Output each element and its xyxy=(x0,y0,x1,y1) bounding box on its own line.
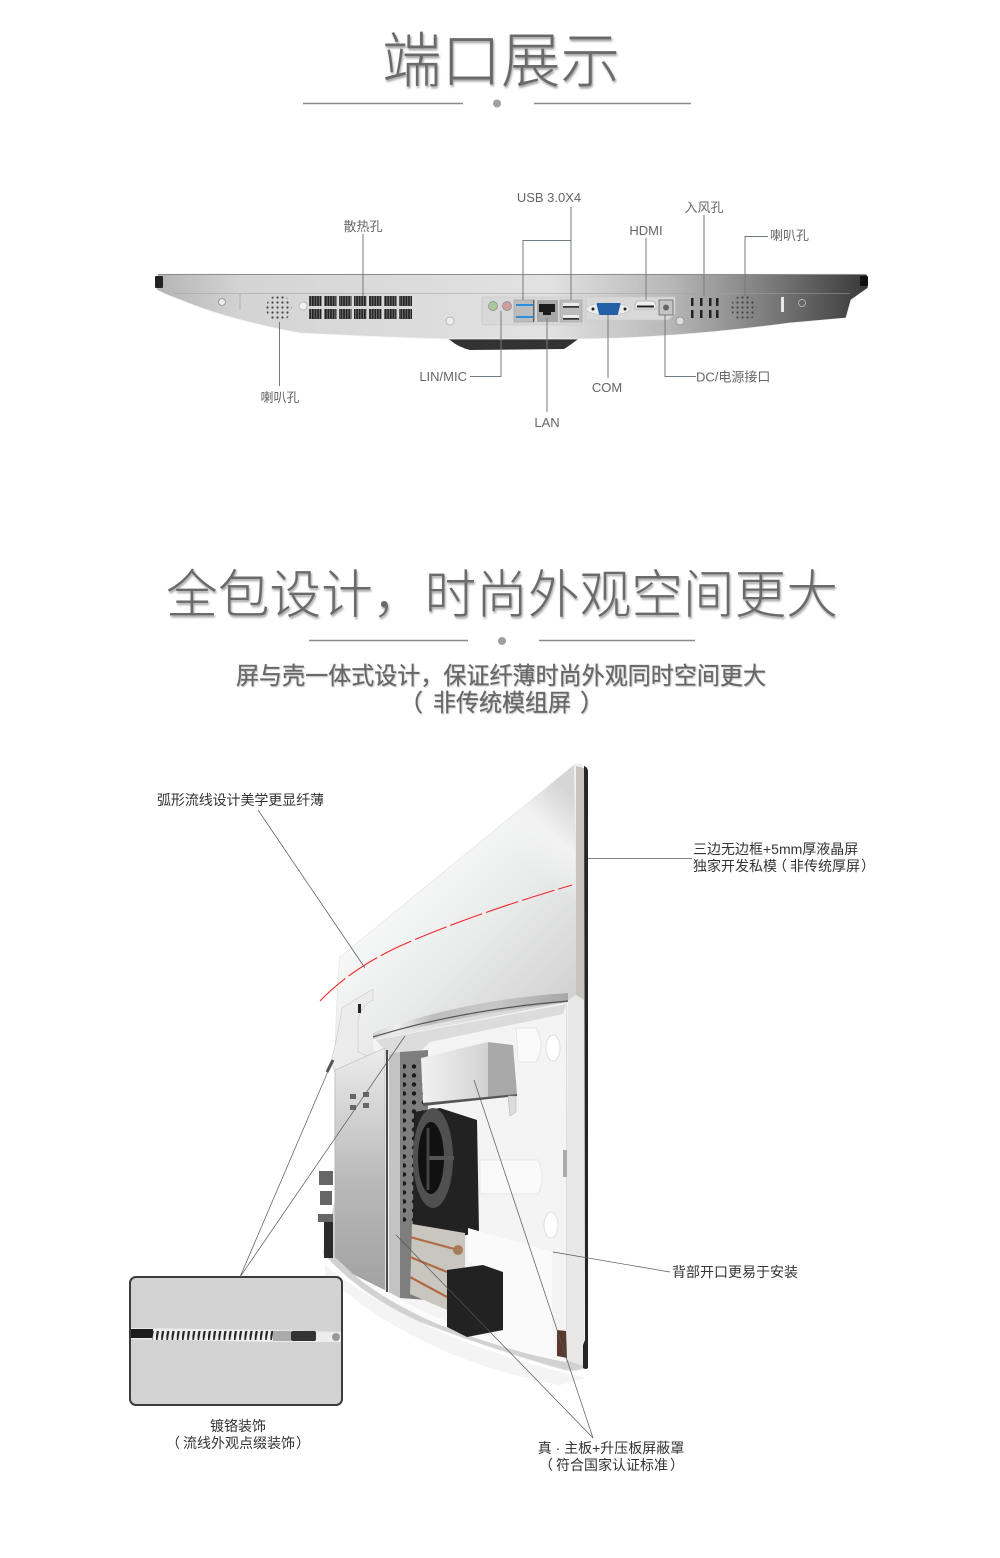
label: shielding cover: 符合国家认证标准 xyxy=(556,1457,668,1473)
label: three-side borderless: （ xyxy=(773,858,787,874)
callout: right speaker: 喇叭孔 xyxy=(770,228,809,243)
audio jacks xyxy=(488,302,498,310)
monitor soft shadow xyxy=(325,1265,586,1385)
port panels xyxy=(482,297,582,325)
callout: USB xyxy=(517,190,581,300)
callout: LIN/MIC: LIN/MIC xyxy=(419,369,467,384)
right speaker holes xyxy=(731,295,757,321)
white lower-left shell band xyxy=(335,1070,566,1362)
label: curved design: 弧形流线设计美学更显纤薄 xyxy=(157,792,324,808)
mounting bosses xyxy=(544,1035,560,1238)
stand base xyxy=(440,336,582,350)
callout: COM: COM xyxy=(592,380,622,395)
chrome trim strip xyxy=(373,993,568,1039)
lower panel xyxy=(468,1228,556,1358)
HDMI port xyxy=(635,301,656,309)
perforated strip xyxy=(400,1050,428,1300)
subtitle: （ xyxy=(399,690,423,717)
label: chrome decoration xyxy=(166,1418,310,1451)
monitor bottom edge with ports xyxy=(155,274,868,350)
label: three-side borderless: 三边无边框+5mm厚液晶屏 xyxy=(693,841,858,857)
monitor shell xyxy=(323,764,584,1371)
subtitle: 非传统模组屏 xyxy=(433,690,571,717)
left speaker holes xyxy=(266,295,292,321)
ledge under trim xyxy=(376,1004,566,1054)
callout: right speaker xyxy=(745,228,809,296)
silver rail xyxy=(389,1052,400,1298)
plate clips xyxy=(350,1092,369,1110)
rear port opening xyxy=(557,1330,567,1358)
label: chrome decoration: 镀铬装饰 xyxy=(210,1418,266,1434)
monitor rear view xyxy=(318,764,588,1385)
air intake holes xyxy=(691,298,718,318)
heat vents xyxy=(309,296,412,319)
connector xyxy=(273,1331,340,1341)
DC port xyxy=(659,300,673,315)
stand mount xyxy=(331,989,373,1074)
black front edge xyxy=(583,766,588,1369)
red curve dashed line xyxy=(320,885,572,1001)
label: three-side borderless: 非传统厚屏 xyxy=(790,858,860,874)
label: three-side borderless xyxy=(693,841,875,874)
label: chrome decoration: （ xyxy=(166,1435,180,1451)
callout: air intake xyxy=(684,200,724,296)
black USB ports xyxy=(560,300,582,322)
subtitle xyxy=(236,663,766,717)
callout: HDMI xyxy=(629,223,663,300)
callout: USB: USB 3.0X4 xyxy=(517,190,581,205)
inset: chrome trim close-up xyxy=(130,1277,342,1405)
callout: LAN: LAN xyxy=(534,415,560,430)
callout: air intake: 入风孔 xyxy=(684,200,724,215)
blue USB ports xyxy=(514,300,534,322)
callout: DC power xyxy=(665,315,770,384)
label: shielding cover: （ xyxy=(539,1457,553,1473)
label: shielding cover xyxy=(538,1440,684,1473)
callout: COM xyxy=(592,315,622,395)
label: three-side borderless: 独家开发私模 xyxy=(693,858,777,874)
subtitle: ） xyxy=(580,690,604,717)
label: shielding cover: ） xyxy=(670,1457,684,1473)
callout: HDMI: HDMI xyxy=(629,223,663,238)
callout: heat vents xyxy=(343,219,383,296)
monitor bar body xyxy=(156,274,868,339)
label: chrome decoration: 流线外观点缀装饰 xyxy=(183,1435,295,1451)
subtitle: 屏与壳一体式设计，保证纤薄时尚外观同时空间更大 xyxy=(236,663,766,690)
section divider xyxy=(309,637,695,645)
heat sink plate with copper pipes xyxy=(410,1224,465,1310)
callout: DC power: DC/电源接口 xyxy=(696,370,770,384)
callout: LIN/MIC xyxy=(419,311,501,384)
callout: heat vents: 散热孔 xyxy=(343,219,383,234)
inner back panel xyxy=(373,1002,568,1358)
title: port display: 端口展示 xyxy=(382,28,620,95)
vent coil xyxy=(152,1331,273,1340)
callout: left speaker: 喇叭孔 xyxy=(260,390,300,405)
callout: LAN xyxy=(534,318,560,430)
title divider xyxy=(303,100,691,108)
recessed slots xyxy=(480,1028,542,1194)
label: three-side borderless: ） xyxy=(861,858,875,874)
LAN port xyxy=(537,300,558,322)
VGA COM port xyxy=(586,303,630,315)
label: rear opening: 背部开口更易于安装 xyxy=(672,1264,798,1280)
label: chrome decoration: ） xyxy=(296,1435,310,1451)
fan xyxy=(413,1108,479,1240)
title: full-wrap design: 全包设计，时尚外观空间更大 xyxy=(166,567,838,625)
callout: left speaker xyxy=(260,322,300,405)
chrome strip xyxy=(131,1328,341,1342)
left metal plate xyxy=(335,1048,385,1290)
divider rail xyxy=(386,1050,388,1292)
label: shielding cover: 真 · 主板+升压板屏蔽罩 xyxy=(538,1440,684,1456)
shell upper-right shading xyxy=(490,765,576,900)
leader lines xyxy=(240,810,692,1438)
silver shield box xyxy=(421,1042,517,1116)
black power module xyxy=(447,1265,503,1337)
side band xyxy=(566,766,584,1366)
side connectors xyxy=(318,1171,333,1258)
